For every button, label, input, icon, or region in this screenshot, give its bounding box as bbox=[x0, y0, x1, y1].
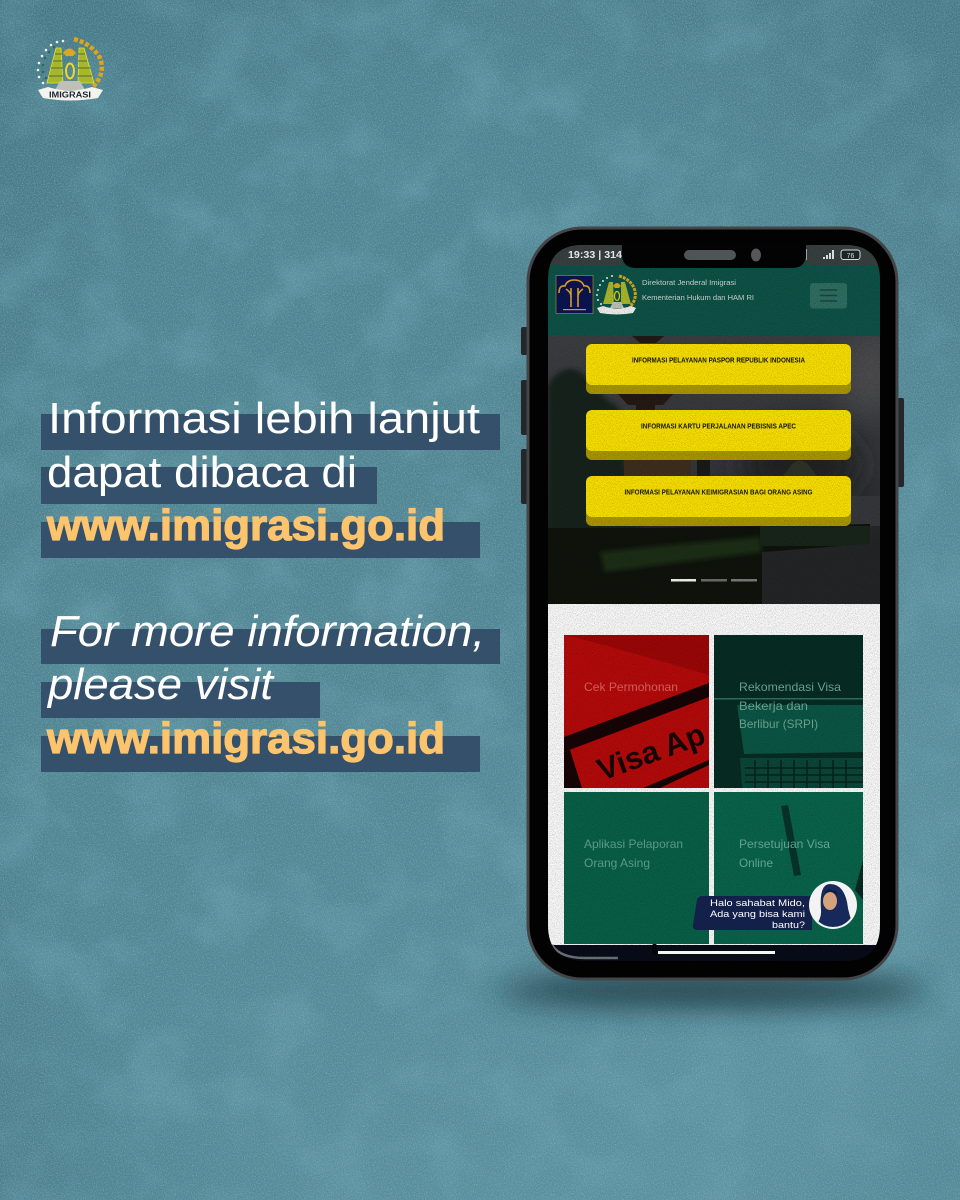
tile: Rekomendasi Visa: Berlibur (SRPI) bbox=[739, 717, 818, 731]
website logos and title: Kementerian Hukum dan HAM RI bbox=[642, 293, 754, 302]
button: orang asing: INFORMASI PELAYANAN KEIMIGRASIAN BAGI ORANG ASING bbox=[624, 488, 813, 496]
hut bbox=[783, 460, 817, 476]
hero photo bbox=[548, 335, 900, 604]
phone mockup bbox=[521, 228, 904, 979]
highlight bars bbox=[41, 414, 500, 558]
hamburger menu button bbox=[810, 283, 847, 308]
tile: Rekomendasi Visa: Bekerja dan bbox=[739, 699, 808, 713]
status bar right: signal and battery: 76 bbox=[847, 253, 854, 260]
phone ground shadow bbox=[497, 970, 927, 1010]
title text: Direktorat Jenderal Imigrasi bbox=[642, 278, 736, 287]
heading line 2: please visit bbox=[46, 660, 275, 709]
button: paspor: INFORMASI PELAYANAN PASPOR REPUBLIK INDONESIA bbox=[632, 356, 805, 364]
camera bbox=[751, 248, 761, 262]
website header bbox=[548, 245, 880, 337]
tile: Cek Permohonan: Cek Permohonan bbox=[584, 680, 678, 694]
status bar left: time: 19:33 | 314 bbox=[568, 249, 622, 261]
phone screen bbox=[548, 245, 900, 962]
screen grain bbox=[548, 245, 880, 962]
side buttons bbox=[521, 327, 904, 504]
tile: Cek Permohonan: Visa Ap bbox=[592, 716, 710, 788]
pagoda bbox=[617, 336, 710, 476]
chat bubble bbox=[693, 896, 812, 931]
url: www.imigrasi.go.id bbox=[46, 501, 445, 550]
website logos and title bbox=[556, 275, 754, 314]
tile: Persetujuan Visa: Online bbox=[739, 856, 773, 870]
tile: Aplikasi Pelaporan: Aplikasi Pelaporan bbox=[584, 837, 683, 851]
trees bbox=[548, 366, 642, 528]
heading line 1: Informasi lebih lanjut bbox=[48, 394, 480, 443]
heading line 2: dapat dibaca di bbox=[47, 448, 357, 497]
upper-right water bbox=[850, 496, 880, 526]
immigration logo bbox=[596, 275, 636, 314]
text block: Indonesian message bbox=[41, 394, 500, 558]
home indicator bbox=[658, 951, 775, 954]
tile: Aplikasi Pelaporan: Orang Asing bbox=[584, 856, 650, 870]
speaker bbox=[684, 250, 736, 260]
logo: Imigrasi emblem: IMIGRASI bbox=[49, 90, 91, 100]
water bbox=[762, 543, 880, 604]
highlight bars bbox=[41, 629, 500, 772]
button: APEC bbox=[586, 410, 851, 460]
chat bubble: Halo sahabat Mido, bbox=[710, 898, 805, 909]
button: APEC: INFORMASI KARTU PERJALANAN PEBISNIS APEC bbox=[641, 422, 796, 430]
carousel indicators bbox=[671, 579, 757, 582]
button: paspor bbox=[586, 344, 851, 394]
tile: Persetujuan Visa: Persetujuan Visa bbox=[739, 837, 830, 851]
status bar right: signal and battery bbox=[806, 249, 860, 260]
chat avatar bbox=[809, 881, 857, 930]
ministry logo bbox=[556, 276, 593, 314]
logo: Imigrasi emblem bbox=[37, 39, 103, 100]
tile: Aplikasi Pelaporan bbox=[564, 792, 709, 944]
white content section bbox=[548, 604, 880, 945]
phone body bbox=[528, 228, 897, 979]
bottom bar bbox=[548, 945, 880, 962]
text block: English message bbox=[41, 607, 500, 772]
tile: Rekomendasi Visa bbox=[714, 635, 863, 788]
tile: Persetujuan Visa bbox=[714, 792, 863, 944]
chat bubble: bantu? bbox=[772, 920, 805, 931]
island bbox=[548, 524, 870, 604]
url: www.imigrasi.go.id bbox=[46, 714, 445, 763]
heading line 1: For more information, bbox=[50, 607, 485, 656]
status bar backgrounds bbox=[548, 245, 880, 265]
tile: Rekomendasi Visa: Rekomendasi Visa bbox=[739, 680, 841, 694]
tile: Cek Permohonan bbox=[564, 635, 710, 788]
button: orang asing bbox=[586, 476, 851, 526]
camera notch bbox=[622, 243, 806, 268]
chat bubble: Ada yang bisa kami bbox=[710, 909, 805, 920]
